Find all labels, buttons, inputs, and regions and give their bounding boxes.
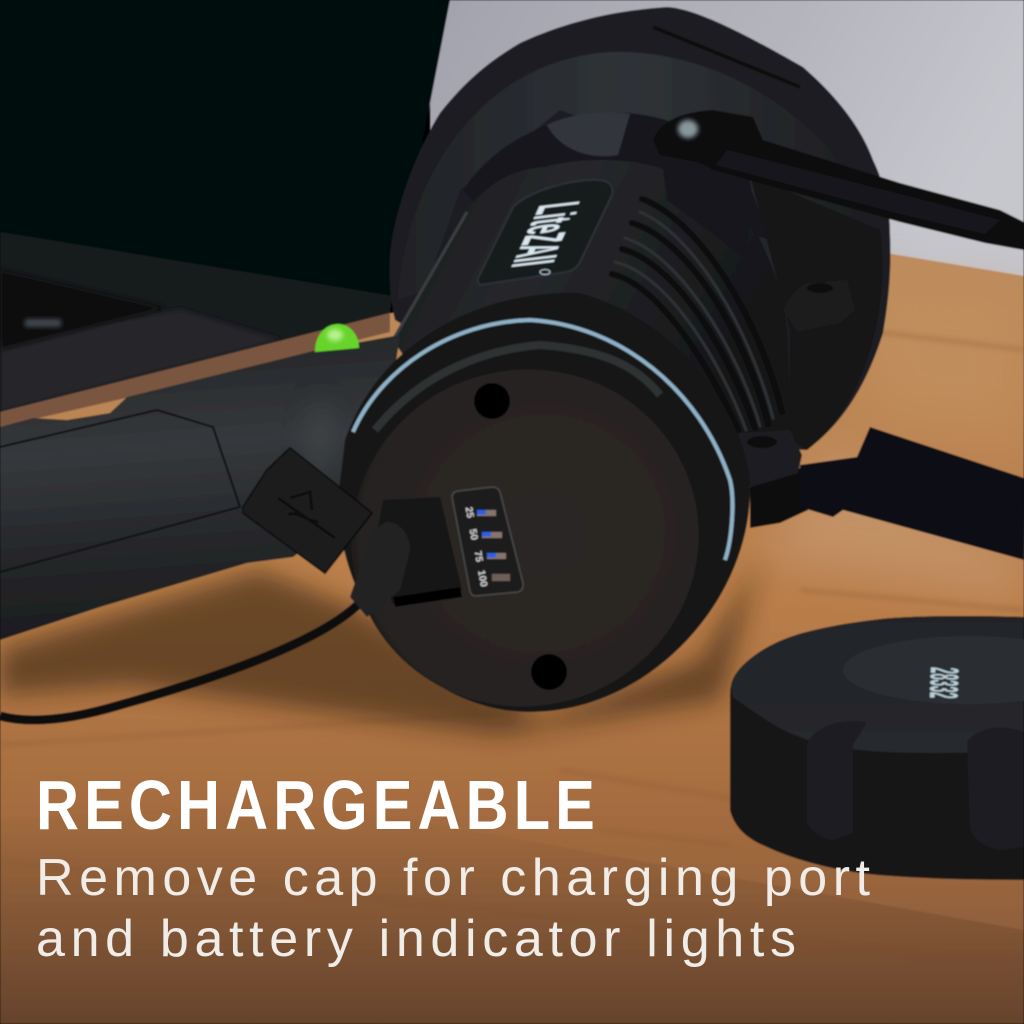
- flashlight: LiteZAll: [498, 199, 592, 270]
- detached lid: [730, 616, 1024, 880]
- battery indicator panel: 75: [472, 550, 484, 563]
- body ribs: [612, 199, 782, 430]
- lid top surface: [732, 616, 1024, 753]
- flashlight: [0, 7, 1024, 745]
- lever arm face: [716, 150, 1000, 234]
- battery indicator panel: [452, 487, 523, 596]
- side lug lower: [738, 430, 802, 487]
- head rim groove: [653, 27, 800, 87]
- rear disc: [313, 331, 737, 745]
- battery indicator panel: 50: [467, 528, 479, 541]
- charging port recess: [372, 497, 462, 607]
- battery indicator panel: 100: [475, 569, 489, 588]
- folding bracket: [800, 427, 1024, 560]
- subheading: and battery indicator lights: [36, 910, 796, 968]
- head reflector dark: [750, 175, 882, 450]
- green button: [315, 324, 359, 352]
- detached lid: 28332: [921, 667, 966, 699]
- side lug upper: [783, 280, 855, 332]
- lever ball: [678, 120, 698, 138]
- lid body: [730, 616, 1024, 880]
- USB cable: [0, 522, 410, 720]
- laptop: [0, 0, 450, 427]
- lid grip right: [967, 727, 1024, 850]
- subheading: [36, 849, 871, 968]
- head inner face: [398, 52, 864, 320]
- wall background: [430, 0, 1024, 300]
- logo plate: [477, 180, 612, 285]
- screw hole top: [474, 383, 510, 419]
- lid recess: [843, 636, 1024, 704]
- left groove: [393, 212, 467, 340]
- lid grip left: [807, 721, 867, 840]
- shoulder hump: [547, 112, 630, 156]
- USB rubber cap: [243, 448, 372, 573]
- heading: RECHARGEABLE: [36, 766, 600, 844]
- battery indicator panel: 25: [463, 506, 475, 519]
- head of flashlight: [389, 7, 891, 450]
- subheading: Remove cap for charging port: [36, 849, 871, 907]
- handle seam: [0, 410, 240, 572]
- pistol handle: [0, 335, 400, 640]
- cylinder body: [393, 160, 792, 460]
- wooden table: [0, 252, 1024, 1024]
- body shoulder: [463, 113, 770, 240]
- lever pivot post: [660, 140, 752, 258]
- screw hole bottom: [531, 654, 567, 690]
- USB symbol: [278, 492, 335, 538]
- bracket foot: [750, 465, 808, 528]
- shadow under flashlight: [0, 560, 760, 735]
- lever arm: [653, 110, 1024, 250]
- rear collar: [338, 293, 750, 712]
- handle neck highlight: [306, 400, 334, 480]
